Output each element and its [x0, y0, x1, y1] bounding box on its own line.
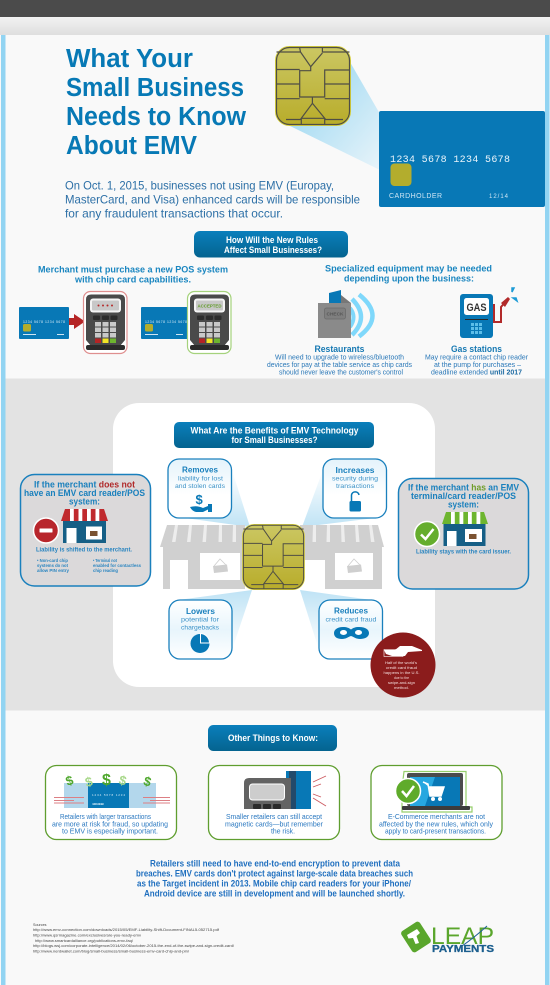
- intro paragraph: [65, 178, 360, 220]
- panel: merchant without reader: If the merchant does not: [34, 480, 135, 490]
- box: removes: and stolen cards: [175, 483, 226, 490]
- closing paragraph: breaches. EMV cards don't protect against large-scale data breaches such: [136, 868, 413, 878]
- box: larger transactions: 1234 5678 1234: [92, 793, 125, 797]
- heading pill: benefits: [174, 422, 374, 448]
- credit card: 12/14: [489, 194, 509, 200]
- subheading: specialized: [325, 264, 492, 284]
- box: e-commerce: apply to card-present transactions.: [385, 826, 486, 836]
- title: Small Business: [66, 74, 244, 102]
- box: increases: transactions: [336, 483, 375, 490]
- credit card: [379, 111, 545, 207]
- box: larger transactions: CARDHOLDER: [92, 802, 105, 806]
- box: removes: [168, 459, 232, 518]
- heading pill: other things: [208, 725, 337, 751]
- panel: benefits band: [6, 378, 545, 710]
- title: Needs to Know: [66, 103, 246, 131]
- text: gas stations: Gas stations: [451, 344, 502, 354]
- icon: restaurant check with wireless waves: CHECK: [326, 312, 344, 316]
- POS terminal accepted: [188, 292, 231, 354]
- box: magnetic cards: [208, 766, 340, 840]
- sources: http://blogs.wsj.com/corporate-intelligence/2014/02/06/october-2015-the-end-of-the-swipe-and-sign-credit-card/: [33, 944, 235, 948]
- icon: restaurant check with wireless waves: [318, 290, 372, 338]
- intro paragraph: MasterCard, and Visa) enhanced cards will be responsible: [65, 192, 360, 206]
- panel: merchant without reader: chip reading: [93, 568, 119, 573]
- box: larger transactions: $: [83, 773, 95, 790]
- subheading: merchant: Merchant must purchase a new POS system: [38, 264, 228, 274]
- box: e-commerce: E-Commerce merchants are not: [388, 812, 485, 821]
- right side bar: [545, 35, 550, 985]
- icon: gas pump: [460, 288, 517, 338]
- text: restaurants: [267, 344, 412, 376]
- panel: merchant with reader: Liability stays with the card issuer.: [416, 548, 511, 556]
- title: [66, 45, 246, 160]
- panel: merchant with reader: [398, 478, 528, 589]
- box: larger transactions: $: [117, 772, 129, 789]
- box: larger transactions: [46, 766, 176, 840]
- box: larger transactions: $: [64, 772, 76, 789]
- card left 1: 1234 5678 1234 5678: [23, 320, 65, 324]
- icon: chip center: [243, 524, 304, 590]
- panel: merchant without reader: Liability is shifted to the merchant.: [36, 546, 132, 554]
- card left 2: [141, 307, 191, 339]
- text: gas stations: at the pump for purchases –: [434, 360, 521, 369]
- logo: leap payments: PAYMENTS: [432, 944, 494, 955]
- box: lowers: [169, 600, 232, 659]
- magnify beam: [288, 62, 380, 170]
- top dark bar: [0, 0, 550, 17]
- panel: merchant without reader: enabled for contactless: [93, 563, 142, 568]
- heading pill: benefits: What Are the Benefits of EMV Technology: [190, 426, 359, 436]
- subheading: specialized: depending upon the business:: [344, 274, 474, 284]
- box: magnetic cards: the risk.: [271, 826, 295, 836]
- closing paragraph: as the Target incident in 2013. Mobile chip card readers for your iPhone/: [137, 878, 411, 888]
- closing paragraph: [136, 858, 413, 898]
- arrow: [69, 314, 85, 329]
- panel: merchant without reader: [20, 474, 150, 586]
- box: e-commerce: affected by the new rules, which only: [379, 820, 493, 828]
- panel: merchant without reader: systems do not: [37, 563, 69, 568]
- subheading: merchant: with chip card capabilities.: [74, 274, 191, 284]
- box: lowers: potential for: [181, 616, 220, 624]
- intro paragraph: On Oct. 1, 2015, businesses not using EMV (Europay,: [65, 178, 334, 192]
- box: larger transactions: $: [102, 772, 111, 789]
- title: What Your: [66, 45, 193, 73]
- box: larger transactions: Retailers with larger transactions: [60, 812, 151, 821]
- box: reduces: [319, 600, 382, 659]
- POS terminal rejected: [84, 292, 127, 354]
- card left 2: 1234 5678 1234 5678: [145, 320, 187, 324]
- callout: fraud stat: happens in the U.S.: [384, 670, 420, 675]
- callout: fraud stat: method.: [394, 685, 409, 690]
- closing paragraph: Android device are still in development and will be launched shortly.: [144, 888, 405, 898]
- panel: merchant without reader: • Non-card chip: [37, 558, 69, 563]
- credit card: CARDHOLDER: [389, 193, 442, 200]
- box: removes: liability for lost: [178, 476, 223, 482]
- beams to boxes: [178, 470, 375, 650]
- box: increases: [323, 459, 386, 518]
- box: removes: $: [196, 492, 204, 507]
- left side bar: [1, 35, 6, 985]
- icon: gas pump: GAS: [466, 302, 486, 314]
- grey store left: [160, 525, 245, 589]
- panel: merchant without reader: have an EMV card reader/POS: [24, 488, 145, 498]
- sources: http://www.emv-connection.com/downloads/2015/05/EMF-Liability-Shift-Document-FINAL5-052715.pdf: [33, 928, 220, 932]
- POS terminal accepted: ACCEPTED: [198, 303, 222, 308]
- panel: white benefits area: [113, 403, 435, 687]
- grey store right: [300, 525, 384, 589]
- box: e-commerce: [371, 766, 502, 840]
- heading pill: other things: Other Things to Know:: [228, 733, 318, 743]
- text: restaurants: devices for pay at the table service as chip cards: [267, 360, 412, 369]
- text: gas stations: [425, 344, 529, 376]
- callout: fraud stat: swipe-and-sign: [388, 680, 415, 685]
- box: removes: Removes: [182, 464, 218, 474]
- text: restaurants: Restaurants: [314, 344, 365, 354]
- panel: merchant without reader: • Terminal not: [93, 558, 118, 563]
- box: increases: security during: [332, 476, 378, 482]
- callout: fraud stat: due to the: [394, 675, 410, 680]
- box: increases: Increases: [336, 465, 375, 475]
- heading pill: benefits: for Small Businesses?: [232, 435, 318, 445]
- box: magnetic cards: Smaller retailers can still accept: [226, 812, 322, 821]
- panel: merchant with reader: If the merchant has an EMV: [408, 482, 519, 492]
- box: lowers: chargebacks: [181, 624, 220, 632]
- top grey strip: [0, 17, 550, 35]
- callout: fraud stat: Half of the world's: [385, 660, 417, 665]
- icon: large chip: [276, 46, 350, 126]
- box: larger transactions: to EMV is especially important.: [62, 826, 158, 836]
- box: magnetic cards: magnetic cards—but remember: [225, 820, 324, 828]
- heading pill: rules: Affect Small Businesses?: [224, 245, 322, 255]
- title: About EMV: [66, 132, 197, 160]
- panel: merchant with reader: terminal/card reader/POS: [411, 491, 516, 501]
- panel: merchant without reader: system:: [69, 496, 100, 506]
- sources: http://www.smartcardalliance.org/publications-emv-faq/: [35, 939, 134, 943]
- text: restaurants: Will need to upgrade to wireless/bluetooth: [275, 352, 404, 362]
- credit card: 1234 5678 1234 5678: [390, 155, 510, 166]
- subheading: specialized: Specialized equipment may be needed: [325, 264, 492, 274]
- heading pill: rules: [194, 231, 348, 258]
- sources: http://www.nerdwallet.com/blog/small-business/small-business-emv-card-chip-and-pin/: [33, 950, 190, 954]
- card left 1: [19, 307, 69, 339]
- sources: [33, 923, 235, 954]
- box: larger transactions: $: [142, 773, 154, 790]
- sources: http://www.qsrmagazine.com/exclusives/are-you-ready-emv: [33, 934, 141, 938]
- logo: leap payments: [400, 921, 494, 955]
- text: gas stations: deadline extended until 2017: [431, 368, 522, 376]
- heading pill: rules: How Will the New Rules: [226, 235, 318, 245]
- closing paragraph: Retailers still need to have end-to-end encryption to prevent data: [150, 858, 401, 868]
- text: restaurants: should never leave the customer's control: [279, 368, 403, 376]
- panel: merchant with reader: system:: [448, 500, 479, 510]
- box: larger transactions: are more at risk for fraud, so updating: [52, 820, 168, 828]
- callout: fraud stat: credit card fraud: [386, 665, 417, 670]
- box: lowers: Lowers: [186, 606, 215, 616]
- logo: leap payments: LEAP: [431, 923, 494, 950]
- sources: Sources: [33, 923, 47, 927]
- box: reduces: Reduces: [334, 606, 368, 616]
- panel: merchant without reader: allow PIN entry: [37, 568, 70, 573]
- text: gas stations: May require a contact chip reader: [425, 352, 529, 362]
- box: reduces: credit card fraud: [326, 616, 377, 624]
- callout: fraud stat: [370, 632, 436, 698]
- subheading: merchant: [38, 264, 228, 284]
- intro paragraph: for any fraudulent transactions that occur.: [65, 206, 283, 220]
